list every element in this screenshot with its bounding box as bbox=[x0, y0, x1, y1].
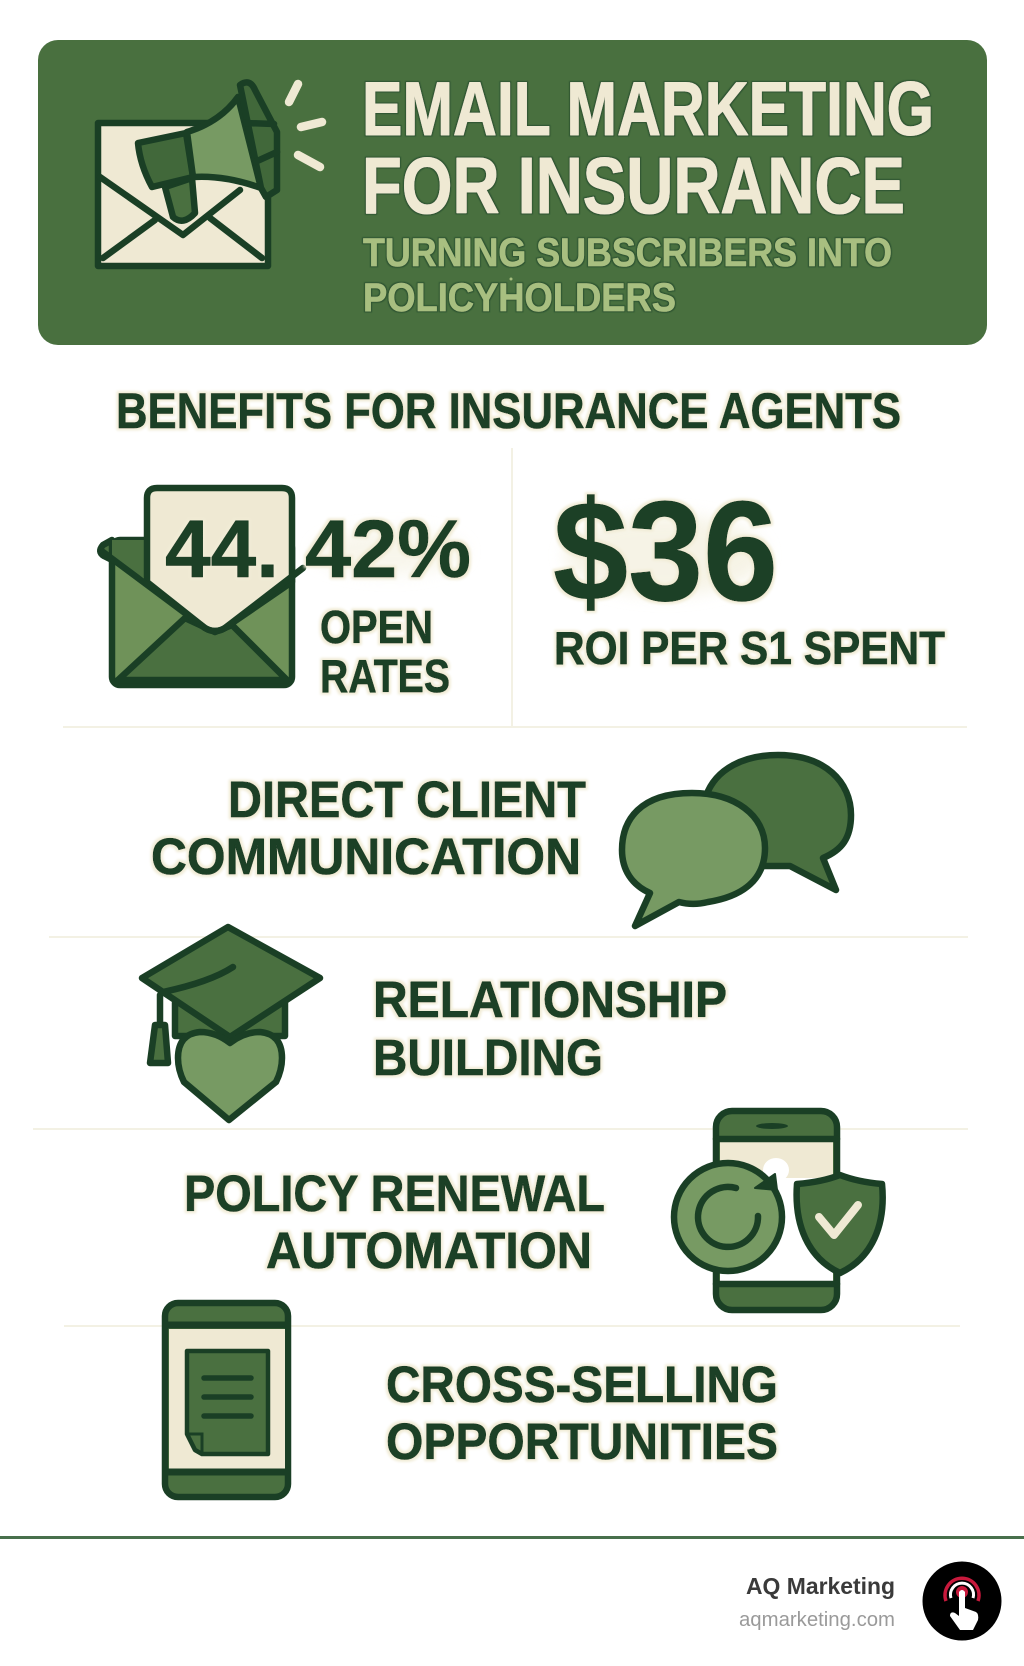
icon: open envelope bbox=[100, 488, 303, 685]
icon: logo bbox=[922, 1562, 1002, 1640]
text: cross-selling opportunities bbox=[386, 1356, 778, 1470]
text: policy renewal automation: POLICY RENEWAL bbox=[184, 1165, 605, 1222]
subtitle: TURNING SUBSCRIBERS INTO bbox=[363, 231, 892, 275]
panel: cross-selling bbox=[165, 1303, 778, 1497]
text: policy renewal automation: AUTOMATION bbox=[266, 1222, 592, 1279]
icon: phone with renewal and shield bbox=[674, 1111, 883, 1310]
text: relationship building: BUILDING bbox=[373, 1029, 603, 1086]
label: open rates: RATES bbox=[320, 650, 450, 702]
text: relationship building: RELATIONSHIP bbox=[373, 971, 727, 1028]
text: website: aqmarketing.com bbox=[739, 1609, 895, 1631]
icon: shield with check bbox=[797, 1175, 883, 1273]
panel: direct client communication bbox=[151, 755, 851, 926]
text: cross-selling opportunities: CROSS-SELLING bbox=[386, 1356, 778, 1413]
panel: ROI bbox=[553, 472, 945, 674]
text: direct client communication bbox=[151, 771, 586, 885]
text: brand name: AQ Marketing bbox=[746, 1573, 895, 1599]
stat: 44.42% bbox=[165, 504, 471, 595]
text: direct client communication: DIRECT CLIENT bbox=[228, 771, 586, 828]
stat: 44.42%: 42% bbox=[305, 504, 471, 595]
label: open rates bbox=[320, 601, 450, 702]
stat: 44.42%: 44. bbox=[165, 504, 279, 595]
label: ROI per $1 spent: ROI PER S1 SPENT bbox=[554, 622, 945, 674]
heading: benefits: BENEFITS FOR INSURANCE AGENTS bbox=[116, 383, 901, 439]
footer: brand bbox=[739, 1562, 1002, 1640]
text: cross-selling opportunities: OPPORTUNITIES bbox=[386, 1413, 778, 1470]
subtitle bbox=[363, 231, 892, 320]
subtitle: POLICYHOLDERS bbox=[363, 276, 676, 320]
text: relationship building bbox=[373, 971, 727, 1086]
stat: $36: $36 bbox=[553, 472, 778, 631]
panel: relationship building bbox=[142, 927, 727, 1120]
icon: chat bubbles bbox=[622, 755, 851, 926]
title bbox=[362, 67, 934, 230]
text: direct client communication: COMMUNICATION bbox=[151, 828, 581, 885]
panel: policy renewal automation bbox=[184, 1111, 883, 1310]
icon: sound rays bbox=[289, 84, 322, 167]
text: policy renewal automation bbox=[184, 1165, 605, 1279]
title: FOR INSURANCE bbox=[362, 141, 905, 230]
icon: renewal arrow bbox=[674, 1163, 782, 1271]
icon: phone with document bbox=[165, 1303, 288, 1497]
header banner bbox=[38, 40, 987, 345]
icon: envelope with megaphone bbox=[98, 82, 322, 266]
label: open rates: OPEN bbox=[320, 601, 433, 653]
icon: graduation cap and heart bbox=[142, 927, 320, 1120]
panel: open rates bbox=[100, 488, 471, 702]
